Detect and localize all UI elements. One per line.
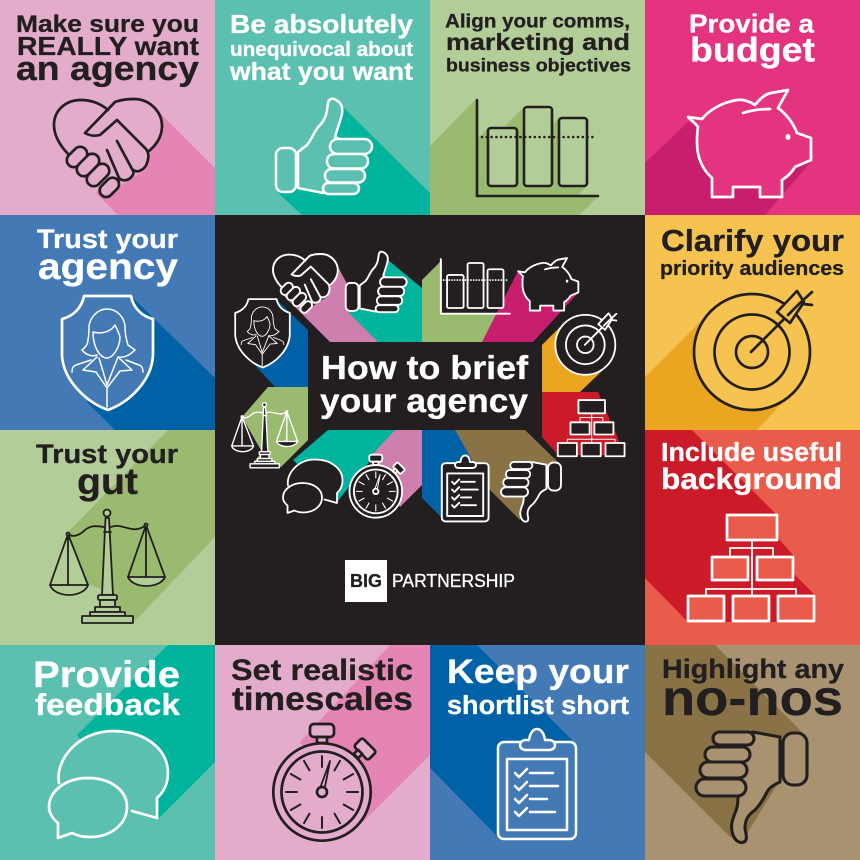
panel: provide a budget <box>645 0 860 215</box>
panel: align objectives <box>430 0 645 215</box>
heading <box>447 653 630 720</box>
long shadow: scales <box>68 430 215 623</box>
heading: Highlight any <box>662 654 844 684</box>
heading: Provide <box>33 653 180 695</box>
icon: target with arrow <box>694 291 812 410</box>
icon: thumb down <box>696 732 807 843</box>
mini icon: stopwatch <box>349 455 405 518</box>
heading <box>36 439 178 502</box>
mini icon: bar chart <box>441 259 510 314</box>
heading <box>37 224 178 287</box>
heading: agency <box>38 245 178 287</box>
heading: business objectives <box>446 54 631 76</box>
icon: thumb up <box>276 99 372 194</box>
heading: Make sure you <box>16 11 199 38</box>
title: your agency <box>320 383 528 420</box>
heading: Include useful <box>661 439 842 467</box>
panel: be absolutely unequivocal <box>215 0 430 215</box>
mini icon: handshake <box>273 254 338 314</box>
heading: Trust your <box>37 224 178 254</box>
icon: speech bubbles <box>49 731 168 838</box>
panel: how to brief your agency <box>215 215 645 645</box>
panel: make sure you really want an agency <box>0 0 215 215</box>
logo: big partnership: PARTNERSHIP <box>392 571 515 591</box>
heading: REALLY want <box>17 33 199 61</box>
panel: keep your shortlist short <box>430 645 645 860</box>
panel: include useful background <box>645 430 860 645</box>
mini icon: target <box>555 313 616 375</box>
mini icon: speech bubbles <box>283 460 342 513</box>
long shadow: speech bubbles <box>77 645 215 819</box>
logo: big partnership <box>345 560 515 602</box>
long shadow: thumb up <box>277 107 430 215</box>
heading: priority audiences <box>660 257 844 280</box>
heading: feedback <box>35 687 181 722</box>
title: How to brief <box>321 350 529 387</box>
heading: background <box>661 463 842 496</box>
long shadow: target <box>645 320 783 430</box>
heading: Align your comms, <box>445 10 630 32</box>
panel: highlight any no-nos <box>645 645 860 860</box>
heading: shortlist short <box>447 692 630 720</box>
heading: Set realistic <box>231 654 413 687</box>
mini icon: piggy bank <box>518 258 578 311</box>
heading: an agency <box>16 50 199 88</box>
long shadow: bar chart <box>430 100 598 215</box>
heading: budget <box>690 32 816 70</box>
panel: trust your gut <box>0 430 215 645</box>
long shadow: handshake <box>96 113 215 215</box>
heading: Provide a <box>689 8 815 38</box>
mini icon: thumb down <box>501 462 561 522</box>
icon: handshake heart <box>54 99 162 200</box>
logo: big partnership: BIG <box>350 571 382 591</box>
mini icon: shield <box>235 299 290 368</box>
long shadow: piggy bank <box>645 122 810 215</box>
panel: clarify priority audiences <box>645 215 860 430</box>
long shadow: stopwatch <box>300 645 430 822</box>
heading: what you want <box>229 58 414 86</box>
heading <box>661 439 842 496</box>
heading: Be absolutely <box>230 9 414 39</box>
panel: trust your agency <box>0 215 215 430</box>
long shadow: thumb down <box>645 645 805 837</box>
heading: gut <box>77 461 138 502</box>
panel: provide feedback <box>0 645 215 860</box>
heading: Trust your <box>36 439 178 469</box>
mini icon: org chart <box>558 400 625 456</box>
icon: shield with woman <box>62 296 153 410</box>
heading: no-nos <box>662 669 843 726</box>
heading <box>16 11 199 88</box>
heading <box>689 8 816 70</box>
heading <box>231 654 413 717</box>
heading <box>229 9 414 86</box>
icon: stopwatch <box>273 724 376 841</box>
icon: scales of justice <box>50 510 165 623</box>
long shadow: clipboard <box>430 645 575 837</box>
panel: set realistic timescales <box>215 645 430 860</box>
heading <box>660 223 844 280</box>
icon: clipboard checklist <box>498 729 576 839</box>
mini icon: clipboard <box>442 455 489 521</box>
heading <box>445 10 631 76</box>
colour shadows above title <box>242 260 625 520</box>
heading: unequivocal about <box>230 39 413 61</box>
heading <box>33 653 181 722</box>
mini icon: scales <box>232 403 298 468</box>
mini icon: thumb up <box>346 252 407 312</box>
heading: timescales <box>232 680 413 717</box>
icon: bar chart <box>477 100 598 196</box>
long shadow: shield <box>87 298 215 430</box>
icon: piggy bank <box>688 90 811 197</box>
long shadow: org chart <box>645 430 815 622</box>
title <box>320 350 529 420</box>
heading: Keep your <box>447 653 629 691</box>
heading: marketing and <box>446 29 630 55</box>
icon: org chart <box>688 515 814 621</box>
heading: Clarify your <box>661 223 844 258</box>
